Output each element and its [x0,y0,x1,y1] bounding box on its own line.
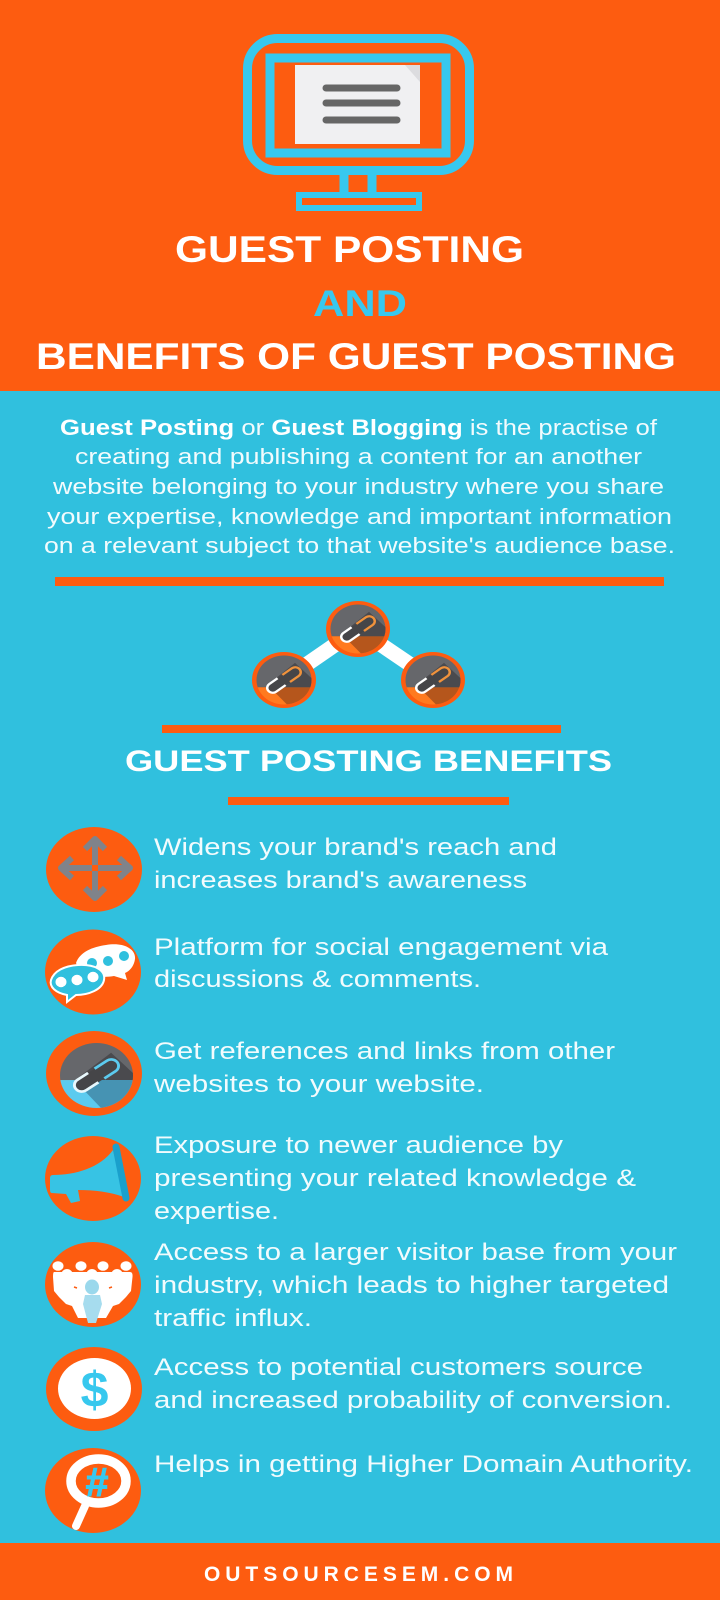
icon: magnifier with hash: # [86,1459,109,1505]
intro paragraph: Guest Posting or Guest Blogging is the practise of [60,415,658,440]
icon: magnifier with hash [45,1448,141,1533]
benefit text: Platform for social engagement via [154,934,609,961]
benefit text: Get references and links from other [154,1038,615,1065]
benefit text [154,834,557,894]
icon: four way arrows [46,827,142,912]
benefit text [153,1038,615,1098]
intro paragraph: your expertise, knowledge and important information [47,504,672,529]
benefit 3: links [46,1031,615,1124]
heading: guest posting benefits: GUEST POSTING BENEFITS [125,745,612,778]
benefit text: Access to a larger visitor base from your [154,1239,677,1266]
icon: right chain circle [401,652,465,708]
benefit text: Access to potential customers source [154,1354,643,1381]
benefit text [154,1354,672,1414]
icon: computer monitor with document [248,38,470,208]
icon: top chain circle [326,601,390,657]
icon: left chain circle [252,652,316,708]
title line 1: GUEST POSTING [175,229,524,270]
benefit text: and increased probability of conversion. [154,1387,672,1414]
benefit text: industry, which leads to higher targeted [154,1272,669,1299]
benefit 2: engagement [45,930,609,1014]
benefit text: increases brand's awareness [154,867,527,894]
benefit text: traffic influx. [154,1305,312,1332]
intro paragraph [44,415,675,558]
benefit text: Exposure to newer audience by [154,1132,563,1159]
benefit text: presenting your related knowledge & [154,1165,636,1192]
icon: crowd of people [45,1242,141,1327]
icon: chain link [46,1031,142,1116]
benefit 1: reach [46,827,557,912]
benefit text: websites to your website. [153,1071,484,1098]
panel: header [0,0,720,391]
benefit 5: visitors [45,1239,677,1332]
intro paragraph: creating and publishing a content for an another [75,444,643,469]
title line 2: AND [313,283,407,324]
benefit text [154,1132,636,1225]
benefit 7: domain authority [45,1448,693,1533]
benefit text: Helps in getting Higher Domain Authority. [154,1451,693,1478]
icon: dollar sign: $ [81,1362,109,1418]
benefit 6: customers [46,1347,672,1431]
benefit text: expertise. [154,1198,279,1225]
title line 3: BENEFITS OF GUEST POSTING [36,336,676,377]
intro paragraph: website belonging to your industry where you share [52,474,664,499]
benefit text [154,1239,677,1332]
benefit text: Widens your brand's reach and [154,834,557,861]
footer band [0,1543,720,1600]
icon: speech bubbles [45,930,141,1014]
benefit text [154,934,609,993]
icon: megaphone [45,1136,141,1221]
intro paragraph: on a relevant subject to that website's audience base. [44,533,675,558]
benefit text: discussions & comments. [154,966,481,993]
icon: linked network of three chain circles [252,601,465,708]
benefit 4: exposure [45,1132,636,1225]
footer text: OUTSOURCESEM.COM [204,1563,513,1586]
icon: dollar sign [46,1347,142,1431]
